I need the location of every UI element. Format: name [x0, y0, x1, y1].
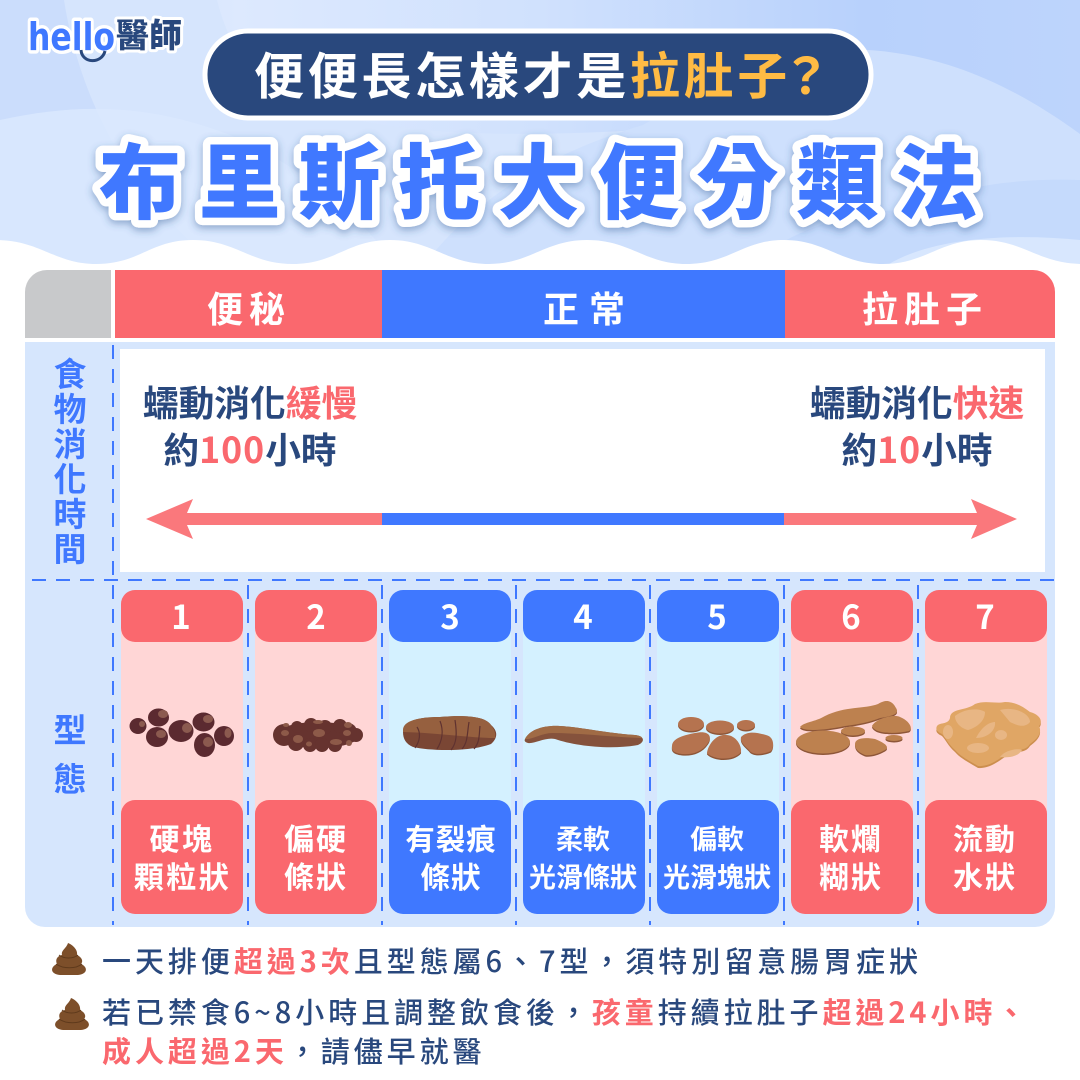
wave divider: [0, 240, 1080, 280]
row label: digestion time: 食: [54, 348, 86, 396]
arrow: digestion speed: [146, 499, 1017, 539]
table header: [25, 270, 1055, 338]
type number tags: 3: [440, 591, 460, 639]
type description tags: 有裂痕: [405, 817, 497, 859]
type description tags: 偏硬: [284, 815, 348, 859]
type description tags: 硬塊: [150, 815, 214, 859]
header cell: normal: 正常: [543, 281, 635, 333]
row label: digestion time: 時: [54, 488, 86, 536]
type number tags: 2: [306, 591, 326, 639]
illustration: type 6 stool: [796, 701, 911, 755]
type description tags: 水狀: [953, 853, 1017, 897]
row label: shape: 型: [54, 704, 86, 752]
type description tags: 光滑塊狀: [663, 856, 771, 895]
type description tags: 光滑條狀: [529, 856, 637, 895]
logo: 醫師: [116, 9, 182, 57]
type number tags: [121, 590, 1047, 642]
header background: [0, 0, 1080, 270]
type description tags: 柔軟: [556, 818, 610, 857]
type description tags: 條狀: [420, 855, 482, 897]
logo stethoscope smile: [81, 50, 105, 61]
slow digestion text: 蠕動消化緩慢: [143, 376, 357, 427]
fast digestion text: 約10小時: [841, 423, 993, 474]
icon: poop bullet 1: [52, 943, 86, 975]
type number tags: 7: [975, 591, 995, 639]
row label: digestion time: 物: [54, 383, 86, 431]
type description tags: 條狀: [284, 853, 348, 897]
row label: digestion time: [54, 348, 86, 571]
table body panel: [25, 342, 1055, 927]
note 2: 成人超過2天，請儘早就醫: [102, 1029, 486, 1071]
fast digestion text: 蠕動消化快速: [810, 376, 1024, 427]
illustration: type 4 stool: [525, 726, 643, 747]
type description tags: 軟爛: [819, 815, 883, 859]
header cell: diarrhea: 拉肚子: [862, 281, 988, 333]
note 2: 若已禁食6~8小時且調整飲食後，孩童持續拉肚子超過24小時、: [102, 990, 1029, 1032]
row label: shape: [54, 704, 86, 801]
subtitle pill: 便便長怎樣才是拉肚子？: [254, 37, 835, 109]
panel: digestion time: [120, 349, 1045, 572]
row label: digestion time: 化: [54, 453, 86, 501]
header cell: constipation: 便秘: [207, 281, 291, 333]
row label: digestion time: 消: [54, 418, 86, 466]
illustration: type 2 stool: [273, 718, 363, 752]
note 2: [102, 990, 1029, 1071]
header cell: diarrhea: [785, 270, 1055, 338]
illustration: type 7 stool: [936, 702, 1041, 766]
illustration: type 3 stool: [403, 716, 496, 750]
row label: shape: 態: [54, 753, 86, 801]
icon: poop bullet 2: [55, 998, 89, 1030]
note 1: 一天排便超過3次且型態屬6、7型，須特別留意腸胃症狀: [102, 939, 922, 981]
type number tags: 6: [841, 591, 861, 639]
logo: hello: [28, 15, 115, 59]
row label: digestion time: 間: [54, 523, 86, 571]
type description tags: 糊狀: [819, 853, 883, 897]
type description tags: [121, 800, 1047, 914]
illustration: type 5 stool: [672, 717, 773, 759]
type description tags: 流動: [953, 815, 1017, 859]
slow digestion text: [143, 376, 357, 474]
header cell: normal: [382, 270, 786, 338]
fast digestion text: [810, 376, 1024, 474]
logo: [28, 9, 182, 61]
column backgrounds: [121, 620, 1047, 820]
type number tags: 4: [573, 591, 593, 639]
type number tags: 1: [171, 591, 191, 639]
type description tags: 顆粒狀: [134, 853, 231, 897]
header cell: blank: [25, 270, 111, 338]
header cell: constipation: [115, 270, 382, 338]
main title: 布里斯托大便分類法: [99, 117, 995, 236]
slow digestion text: 約100小時: [163, 423, 337, 474]
type description tags: 偏軟: [690, 818, 744, 857]
illustration: type 1 stool: [130, 708, 234, 757]
type number tags: 5: [707, 591, 727, 639]
